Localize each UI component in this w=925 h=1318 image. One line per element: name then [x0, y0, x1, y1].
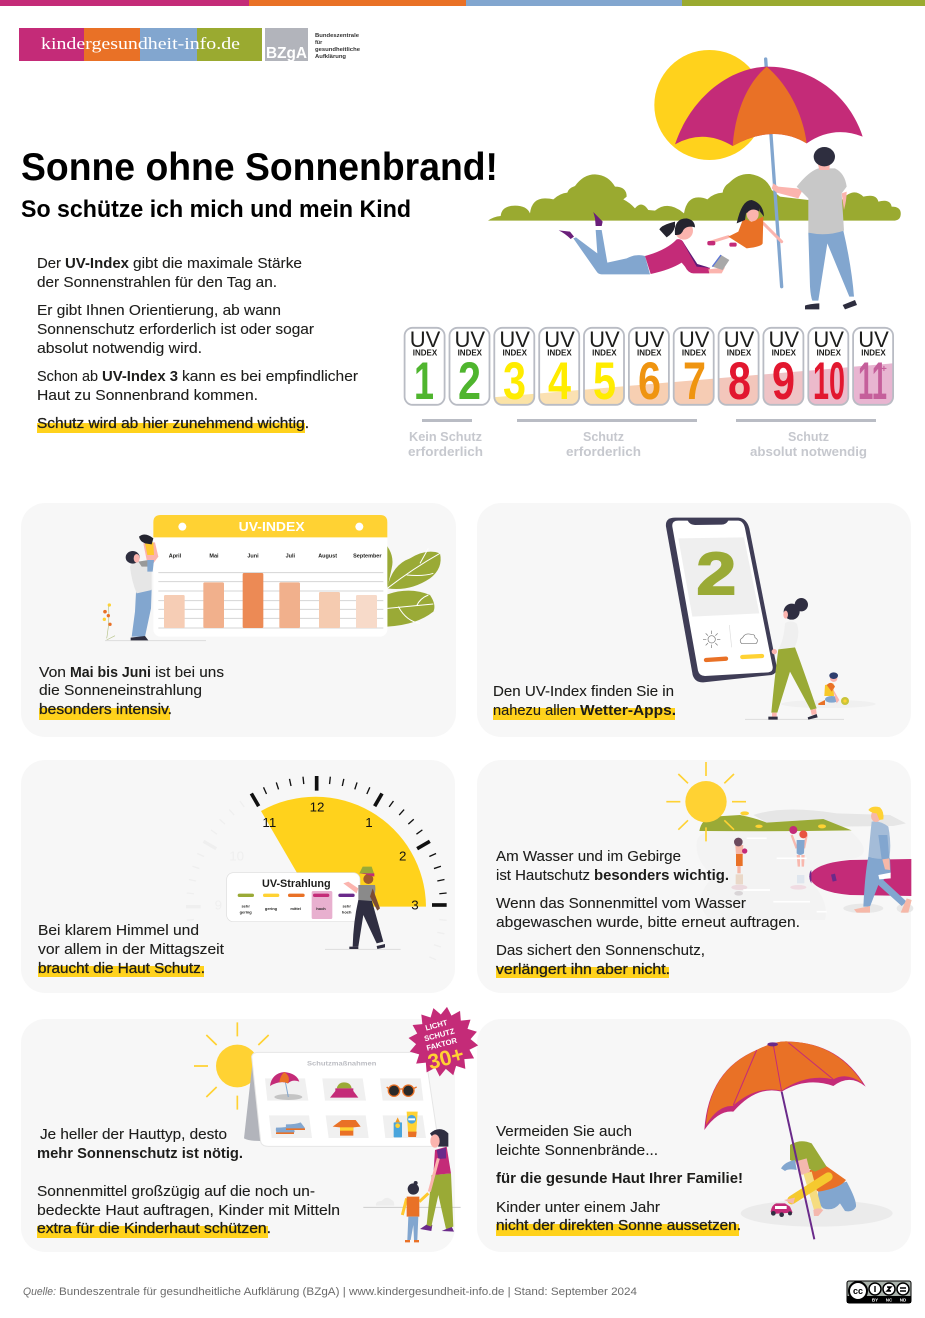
text: Wetter-Apps: nahezu allen	[493, 703, 576, 719]
card labels: UV	[410, 327, 441, 352]
card numbers: +	[881, 364, 887, 375]
top colour bar	[0, 0, 925, 6]
clock numbers: 1	[365, 815, 373, 830]
clock numbers: 11	[262, 815, 276, 830]
illustration: sun clock	[186, 776, 447, 960]
woman with hat	[325, 867, 401, 949]
UV-Strahlung legend	[227, 873, 360, 922]
text: Wasser und Gebirge: Wenn das Sonnenmittel vom Wasser	[496, 896, 746, 912]
leaves	[385, 543, 441, 627]
clock numbers	[262, 799, 419, 912]
footer source: Bundeszentrale für gesundheitliche Aufklärung (BZgA) | www.kindergesundheit-info.de | Stand: September 2024	[59, 1286, 637, 1298]
panel: Wasser und Gebirge	[477, 760, 913, 993]
sun	[194, 1022, 269, 1110]
UV-Strahlung legend: sehr	[342, 904, 351, 909]
logo: BZgA: Bundeszentrale	[315, 33, 359, 39]
illustration: beach	[666, 762, 913, 920]
card numbers: 4	[548, 352, 571, 411]
intro text: absolut notwendig wird.	[37, 341, 202, 357]
mother and child	[363, 1129, 461, 1242]
intro text: Sonnenschutz erforderlich ist oder sogar	[37, 322, 314, 338]
intro text: Schutz wird ab hier zunehmend wichtig.	[37, 416, 309, 432]
illustration: sun clock: 9	[215, 897, 222, 912]
text: Wasser und Gebirge: ist Hautschutz	[496, 868, 590, 884]
text: Wasser und Gebirge	[496, 849, 800, 978]
waves	[743, 838, 827, 912]
icon: sunscreen	[394, 1112, 418, 1137]
UV-Strahlung legend: hoch	[342, 910, 352, 915]
text: Mai bis Juni: Von	[39, 665, 66, 681]
flower	[103, 603, 115, 640]
card numbers: 8	[728, 352, 751, 411]
icon: hat	[330, 1082, 358, 1098]
sand and water	[697, 831, 864, 920]
text: Hauttyp und Sonnenmittel: Je heller der Hauttyp, desto	[40, 1127, 227, 1143]
card numbers: 10	[813, 352, 845, 411]
dial ticks	[251, 776, 447, 905]
group label: Schutz erforderlich: erforderlich	[566, 445, 641, 459]
text: Sonnenbrände vermeiden	[496, 1124, 743, 1236]
text: Sonnenbrände vermeiden: Kinder unter einem Jahr	[496, 1200, 660, 1216]
intro text	[37, 256, 358, 433]
card labels: UV	[679, 327, 710, 352]
green island	[699, 815, 852, 831]
icon: shoes	[276, 1122, 305, 1134]
text: Wasser und Gebirge: verlängert ihn aber nicht.	[496, 962, 670, 978]
UV-Strahlung legend: sehr	[241, 904, 250, 909]
panel: Hauttyp und Sonnenmittel	[21, 1019, 461, 1252]
card labels: INDEX	[637, 348, 662, 358]
text: Mai bis Juni: besonders intensiv.	[39, 702, 172, 718]
intro text: der Sonnenstrahlen für den Tag an.	[37, 275, 277, 291]
lying woman	[559, 212, 729, 274]
icon: sunglasses	[387, 1085, 417, 1096]
text: Wetter-Apps	[493, 684, 676, 720]
text: Wetter-Apps: Wetter-Apps.	[580, 703, 676, 719]
text: Sonnenbrände vermeiden: Vermeiden Sie auch	[496, 1124, 632, 1140]
phone: 2	[697, 540, 736, 607]
text: Sonnenbrände vermeiden: leichte Sonnenbrände...	[496, 1143, 658, 1159]
intro text: UV-Index 3	[102, 369, 178, 385]
card labels: INDEX	[502, 348, 528, 358]
UV-Strahlung legend: UV-Strahlung	[262, 878, 331, 890]
card labels: INDEX	[592, 348, 617, 358]
card numbers: 11	[858, 352, 887, 411]
text: Wasser und Gebirge: Das sichert den Sonnenschutz,	[496, 943, 705, 959]
badge: Lichtschutzfaktor 30+: LICHT	[424, 1018, 449, 1033]
text: Mittagszeit: vor allem in der Mittagszeit	[38, 942, 224, 958]
clock numbers: 2	[399, 848, 406, 863]
group label: kein Schutz	[408, 419, 483, 459]
intro text: Der	[37, 256, 61, 272]
card labels: UV	[455, 327, 485, 352]
text: Wetter-Apps: Den UV-Index finden Sie in	[493, 684, 674, 700]
card labels: UV	[724, 327, 755, 352]
card labels: INDEX	[816, 348, 842, 358]
badge: Lichtschutzfaktor 30+: SCHUTZ	[423, 1026, 456, 1043]
canopy	[704, 1041, 866, 1130]
logo: BZgA	[265, 28, 360, 62]
man lifting child	[105, 535, 206, 641]
text: Wasser und Gebirge: abgewaschen wurde, bitte erneut auftragen.	[496, 915, 800, 931]
board: Schutzmaßnahmen	[307, 1061, 376, 1068]
card labels: INDEX	[727, 348, 752, 358]
icon: CC licence badge: ND	[900, 1298, 907, 1302]
card labels: UV	[813, 327, 844, 352]
text: Mittagszeit: Bei klarem Himmel und	[38, 923, 199, 939]
panel: Wetter-Apps	[477, 503, 911, 737]
card labels: UV	[634, 327, 665, 352]
logo: BZgA: für	[315, 40, 323, 46]
illustration: phone with UV index	[666, 518, 876, 720]
icon: CC licence badge: NC	[886, 1298, 893, 1302]
standing man	[772, 147, 857, 309]
umbrella pole	[766, 59, 782, 287]
intro text: UV-Index	[65, 256, 130, 272]
illustration: child under umbrella	[704, 1041, 893, 1239]
clock numbers: 3	[411, 897, 419, 912]
icon: CC licence badge: BY	[872, 1298, 878, 1302]
child with ball	[731, 838, 747, 896]
text: Wasser und Gebirge: besonders wichtig.	[594, 868, 729, 884]
panel: Mai bis Juni	[21, 503, 456, 737]
illustration: UV-index calendar: Mai	[209, 554, 219, 560]
text: Hauttyp und Sonnenmittel: mehr Sonnenschutz ist nötig.	[37, 1146, 243, 1162]
illustration: UV-index calendar: September	[353, 554, 382, 560]
card labels: UV	[499, 327, 530, 352]
card labels: INDEX	[458, 348, 483, 358]
faint dial	[186, 801, 447, 960]
card numbers: 6	[638, 352, 661, 411]
group label: Schutz absolut notwendig	[736, 419, 876, 459]
bar chart	[164, 573, 377, 628]
badge: Lichtschutzfaktor 30+: 30+	[425, 1042, 466, 1075]
text: Mittagszeit	[38, 923, 224, 977]
girl with ball	[789, 826, 807, 890]
card fills	[494, 363, 894, 405]
card labels: INDEX	[547, 348, 572, 358]
logo: BZgA: BZgA	[266, 45, 307, 62]
text: Hauttyp und Sonnenmittel: Sonnenmittel großzügig auf die noch un-	[37, 1184, 315, 1200]
group label: kein Schutz: erforderlich	[408, 445, 483, 459]
intro text: Schon ab	[37, 369, 98, 385]
intro text: Haut zu Sonnenbrand kommen.	[37, 388, 258, 404]
sun	[666, 762, 746, 841]
card labels: UV	[769, 327, 799, 352]
group label: Schutz erforderlich: Schutz	[583, 430, 624, 444]
umbrella canopy	[675, 67, 863, 146]
card numbers	[414, 352, 887, 411]
card labels: INDEX	[772, 348, 797, 358]
text: Mai bis Juni	[39, 665, 224, 720]
UV-Strahlung legend: gering	[240, 910, 252, 915]
icon: sweater	[333, 1120, 361, 1136]
subtitle: So schütze ich mich und mein Kind	[21, 196, 411, 223]
card numbers: 2	[458, 352, 481, 411]
card labels: UV	[589, 327, 620, 352]
woman	[768, 598, 818, 720]
text: Hauttyp und Sonnenmittel	[37, 1127, 340, 1238]
card outlines	[405, 328, 893, 405]
card labels: INDEX	[861, 348, 886, 358]
UV index scale	[405, 327, 894, 459]
sun	[654, 50, 764, 160]
text: Sonnenbrände vermeiden: für die gesunde Haut Ihrer Familie!	[496, 1171, 743, 1187]
text: Mai bis Juni: ist bei uns	[155, 665, 224, 681]
illustration: sun clock: 10	[229, 848, 244, 863]
child	[781, 1141, 856, 1216]
intro text: gibt die maximale Stärke	[133, 256, 302, 272]
text: Sonnenbrände vermeiden: nicht der direkten Sonne aussetzen.	[496, 1218, 741, 1234]
card numbers: 1	[414, 352, 434, 411]
card labels: UV	[544, 327, 575, 352]
card numbers: 7	[683, 352, 706, 411]
illustration: UV-index calendar: April	[169, 554, 182, 560]
text: Wasser und Gebirge: Am Wasser und im Gebirge	[496, 849, 681, 865]
illustration: UV-index calendar: August	[318, 554, 337, 560]
text: Hauttyp und Sonnenmittel: extra für die Kinderhaut schützen.	[37, 1221, 271, 1237]
logo: kindergesundheit-info.de: kindergesundheit-info.de	[41, 34, 240, 53]
sitting girl	[707, 200, 782, 248]
pole	[782, 1092, 814, 1239]
toy car	[771, 1203, 793, 1217]
panel: Sonnenbrände vermeiden	[477, 1019, 911, 1252]
card labels: INDEX	[413, 348, 438, 358]
icon: umbrella	[270, 1072, 302, 1100]
logo: kindergesundheit-info.de	[19, 28, 262, 61]
card numbers: 3	[503, 352, 526, 411]
UV-Strahlung legend: mittel	[290, 906, 301, 911]
mountain	[753, 810, 906, 827]
child with ball	[818, 672, 849, 705]
card labels: INDEX	[682, 348, 707, 358]
text: Mittagszeit: braucht die Haut Schutz.	[38, 961, 205, 977]
illustration: UV-index calendar: UV-INDEX	[239, 520, 305, 534]
illustration: UV-index calendar	[103, 515, 441, 641]
group label: Schutz erforderlich	[517, 419, 697, 459]
phone	[666, 518, 777, 682]
card numbers: 9	[772, 352, 795, 411]
group label: Schutz absolut notwendig: absolut notwendig	[750, 445, 867, 459]
logo: BZgA: Aufklärung	[315, 54, 346, 60]
illustration: UV-index calendar: Juni	[247, 554, 259, 560]
yellow sector	[261, 797, 426, 907]
surfer	[843, 807, 913, 913]
icon: CC licence badge	[847, 1281, 911, 1303]
hero illustration: family under umbrella	[488, 50, 901, 309]
title: Sonne ohne Sonnenbrand!	[21, 146, 498, 189]
illustration: Schutzmaßnahmen	[194, 1022, 461, 1242]
badge: Lichtschutzfaktor 30+: FAKTOR	[425, 1036, 458, 1053]
UV-Strahlung legend: hoch	[316, 906, 326, 911]
illustration: UV-index calendar: Juli	[286, 554, 296, 560]
UV-Strahlung legend: gering	[265, 906, 278, 911]
clock numbers: 12	[310, 799, 324, 814]
text: Mai bis Juni: die Sonneneinstrahlung	[39, 683, 202, 699]
bushes	[488, 174, 901, 221]
card labels	[410, 327, 889, 358]
text: Mai bis Juni: Mai bis Juni	[70, 665, 151, 681]
logo: BZgA: gesundheitliche	[315, 47, 360, 53]
icon: CC licence badge: cc	[853, 1286, 863, 1296]
group label: Schutz absolut notwendig: Schutz	[788, 430, 829, 444]
card labels: UV	[858, 327, 889, 352]
group label: kein Schutz: Kein Schutz	[409, 430, 482, 444]
footer source: Quelle:	[23, 1286, 56, 1298]
text: Hauttyp und Sonnenmittel: bedeckte Haut auftragen, Kinder mit Mitteln	[37, 1203, 340, 1219]
panel: Mittagszeit	[21, 760, 455, 993]
badge: Lichtschutzfaktor 30+	[405, 1003, 482, 1080]
intro text: Er gibt Ihnen Orientierung, ab wann	[37, 303, 281, 319]
intro text: kann es bei empfindlicher	[182, 369, 358, 385]
surfboard	[809, 859, 911, 896]
card numbers: 5	[593, 352, 616, 411]
board	[244, 1052, 438, 1146]
calendar	[153, 515, 387, 637]
